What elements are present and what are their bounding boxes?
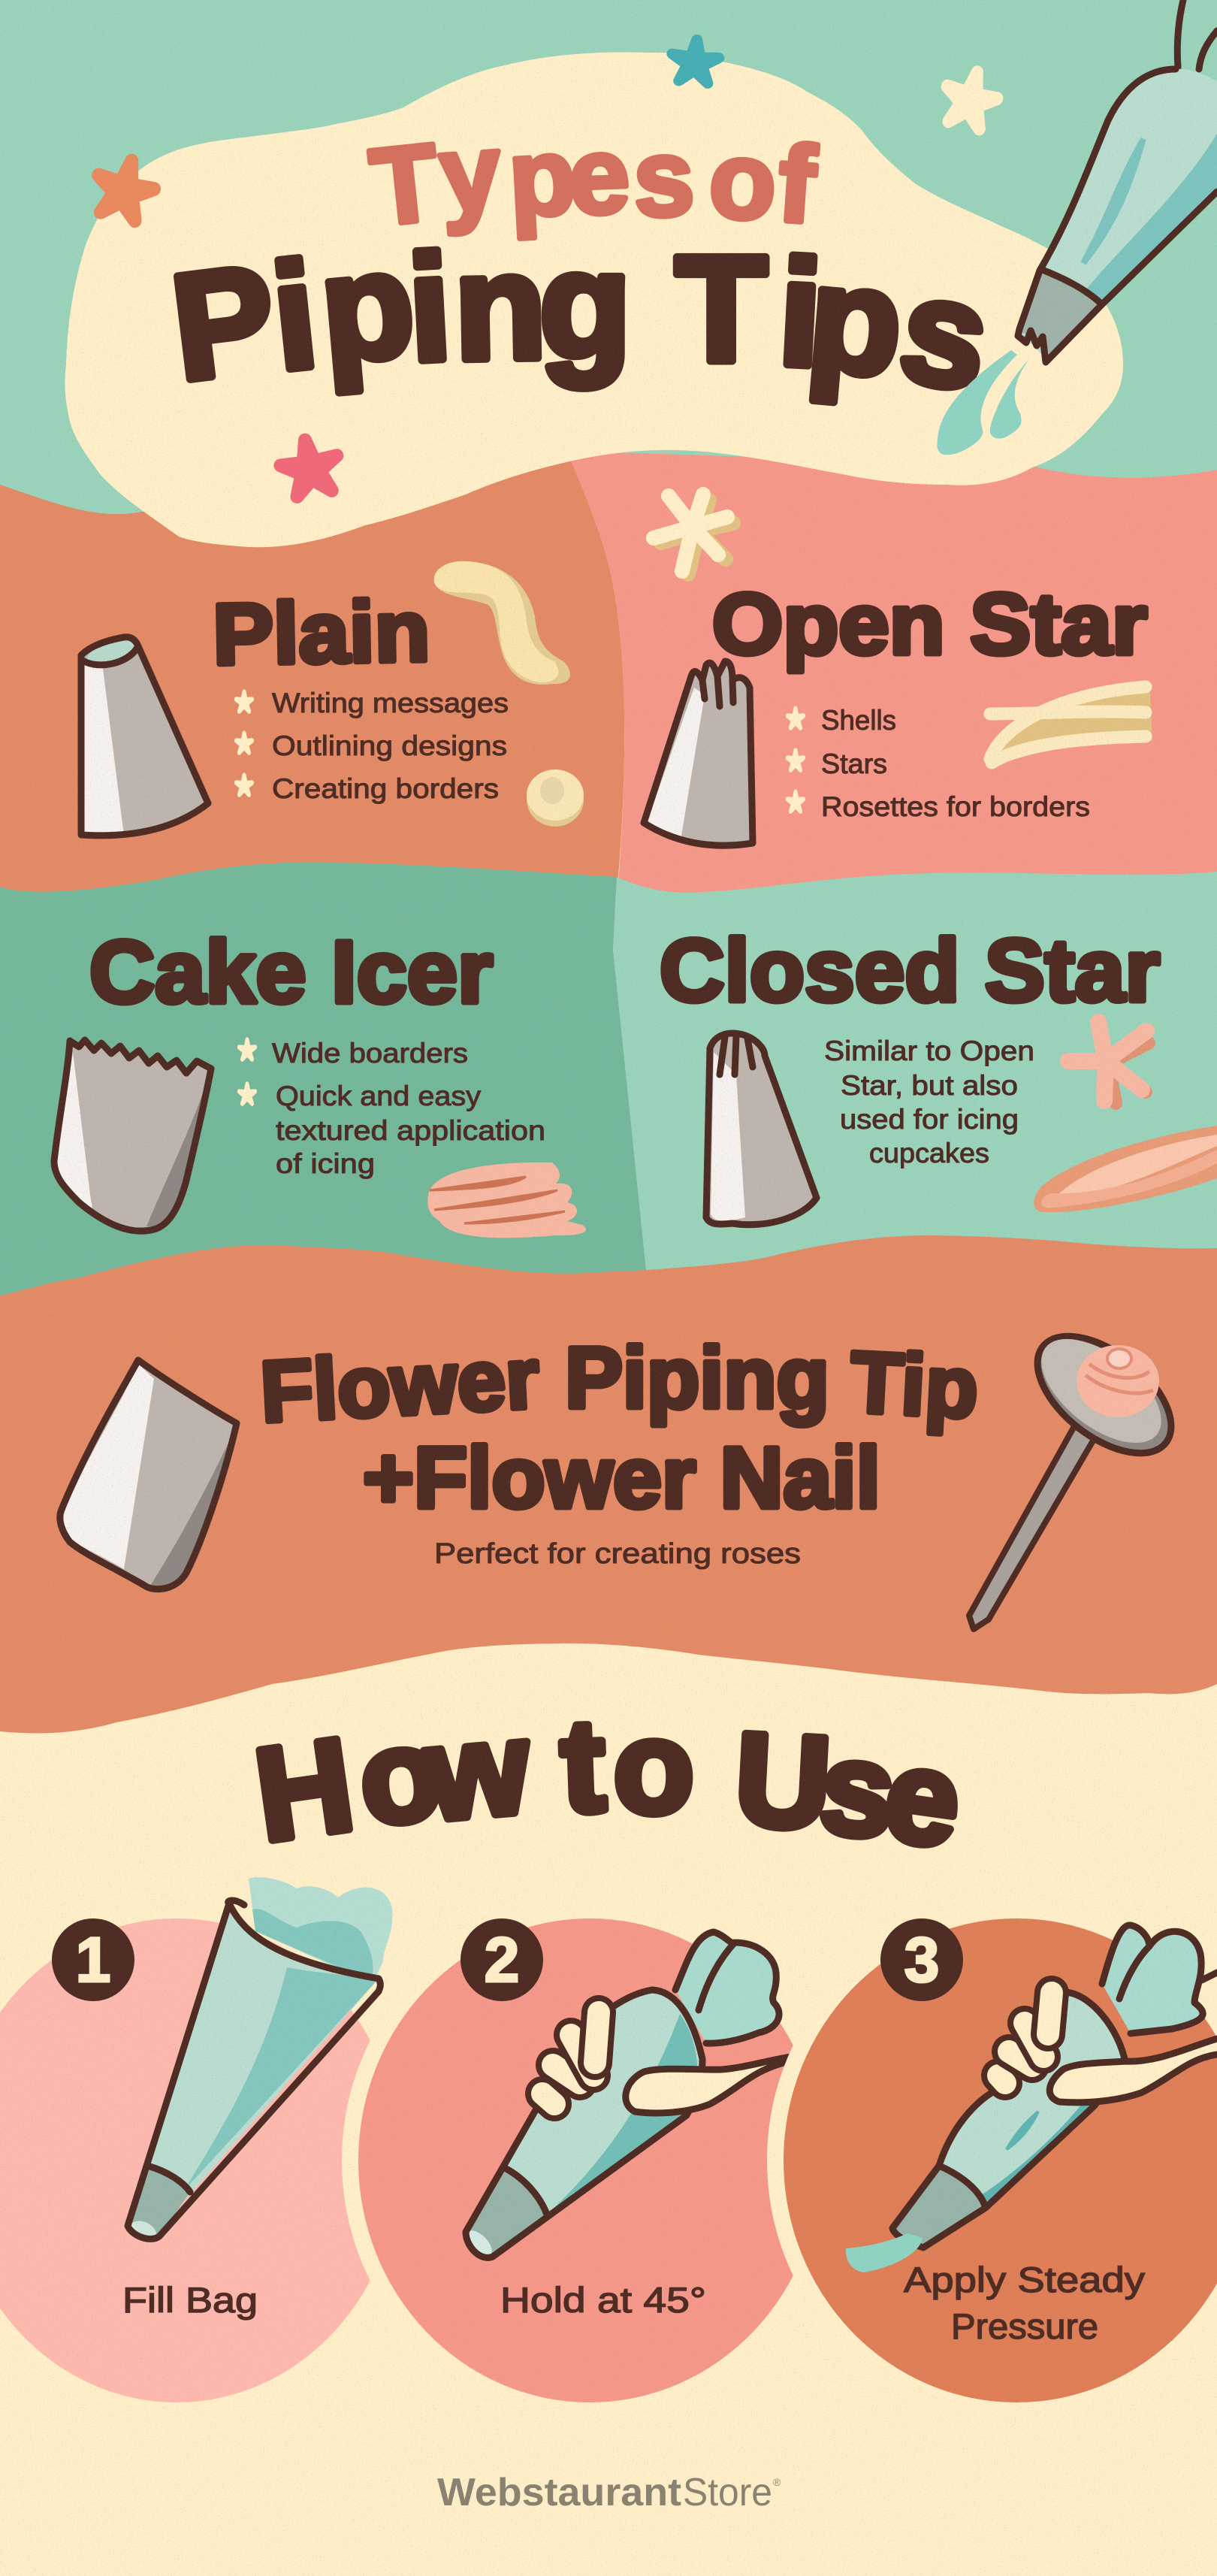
badge: step 1 (52, 1918, 134, 2001)
logo: WebstaurantStore: Webstaurant (437, 2471, 681, 2514)
logo: WebstaurantStore: Store (683, 2471, 772, 2514)
illustration: header piping bag (937, 0, 1217, 455)
sample: cake icer swatch (427, 1163, 586, 1238)
icon: red star (277, 435, 343, 499)
list: cake icer uses: of icing (276, 1148, 375, 1179)
panel: plain background (0, 451, 624, 894)
list: plain uses (272, 688, 509, 804)
icon: plain tip (81, 632, 208, 836)
badge: step 3: 3 (904, 1924, 939, 1995)
list: open star uses: Shells (821, 705, 896, 736)
heading: Flower Piping Tip (258, 1330, 980, 1441)
icon: closed star tip (706, 1033, 817, 1225)
list: cake icer uses (272, 1038, 545, 1179)
step 1 circle (0, 1918, 400, 2402)
icon: orange star (90, 154, 159, 223)
list: cake icer uses: Wide boarders (272, 1038, 468, 1069)
step 3 circle (784, 1918, 1217, 2402)
step 2 circle (358, 1918, 821, 2402)
heading: Closed Star: Closed Star (660, 921, 1160, 1020)
step 2 hand (542, 2012, 793, 2113)
illustration: icing streams (937, 350, 1029, 455)
icon: flower tip (60, 1360, 237, 1589)
text: closed star description: used for icing (840, 1104, 1019, 1135)
panel: open star background (566, 451, 1217, 902)
sample: closed star ribbon (1034, 1126, 1217, 1212)
heading: Plain: Plain (212, 583, 430, 683)
heading: Open Star: Open Star (712, 576, 1147, 673)
list: plain uses: Creating borders (272, 773, 499, 804)
icon: flower nail (969, 1314, 1191, 1629)
background: mint header (0, 0, 1217, 571)
badge: step 2 (461, 1918, 543, 2001)
sample: plain dot (527, 769, 584, 827)
sample: closed star flower (1068, 1022, 1149, 1103)
sample: open star strands (988, 682, 1152, 768)
list: cake icer uses: textured application (276, 1115, 545, 1146)
icon: open star tip (644, 661, 753, 845)
text: closed star description (824, 1036, 1034, 1169)
heading: + Flower Nail: +Flower Nail (363, 1430, 880, 1526)
label: Apply Steady Pressure: Pressure (951, 2306, 1098, 2346)
label: Apply Steady Pressure: Apply Steady (904, 2260, 1146, 2299)
icon: teal star (670, 38, 720, 84)
bullets: cake icer (239, 1040, 255, 1104)
text: closed star description: Similar to Open (824, 1036, 1034, 1066)
icon: cream asterisk star (654, 494, 733, 574)
label: Hold at 45: Hold at 45° (500, 2280, 706, 2320)
panel: flower tip background (0, 1235, 1217, 1734)
heading: How to Use: How to Use (247, 1692, 969, 1876)
step 3 hand (998, 1993, 1217, 2103)
title: Types of: Types of (365, 110, 820, 249)
bullets: open star (787, 709, 804, 812)
text: flower tip caption: Perfect for creating roses (434, 1538, 801, 1570)
list: open star uses: Rosettes for borders (821, 791, 1090, 822)
step 3 icing drop (846, 2233, 923, 2272)
header blob (65, 53, 1123, 547)
list: cake icer uses: Quick and easy (276, 1081, 482, 1111)
list: plain uses: Writing messages (272, 688, 509, 718)
panel: cake icer background (0, 863, 654, 1323)
badge: step 3 (880, 1918, 963, 2001)
label: Apply Steady Pressure (904, 2260, 1146, 2346)
text: closed star description: cupcakes (869, 1138, 989, 1169)
bullets: plain (236, 692, 252, 795)
illustration: step 3 bag (846, 1925, 1217, 2272)
heading: Flower Piping Tip: Flower (258, 1330, 542, 1441)
list: open star uses (821, 705, 1090, 822)
badge: step 2: 2 (485, 1924, 519, 1995)
panel: closed star background (613, 872, 1217, 1293)
heading: Cake Icer: Cake Icer (89, 923, 493, 1022)
illustration: step 2 bag (461, 1932, 793, 2262)
heading: Flower Piping Tip: Tip (848, 1334, 980, 1437)
badge: step 1: 1 (76, 1924, 110, 1995)
text: closed star description: Star, but also (841, 1070, 1018, 1101)
list: open star uses: Stars (821, 748, 887, 779)
illustration: step 1 bag (128, 1877, 392, 2244)
title: Piping Tips: Piping Tips (164, 219, 999, 423)
logo: WebstaurantStore: ® (773, 2476, 781, 2488)
list: plain uses: Outlining designs (272, 730, 507, 761)
icon: cake icer tip (54, 1040, 211, 1231)
icon: cream star (939, 66, 1002, 132)
rose (1077, 1345, 1159, 1417)
label: Fill Bag: Fill Bag (122, 2280, 258, 2320)
logo: WebstaurantStore (437, 2471, 781, 2514)
sample: plain squiggle (434, 561, 570, 685)
heading: Flower Piping Tip: Piping (565, 1330, 829, 1426)
